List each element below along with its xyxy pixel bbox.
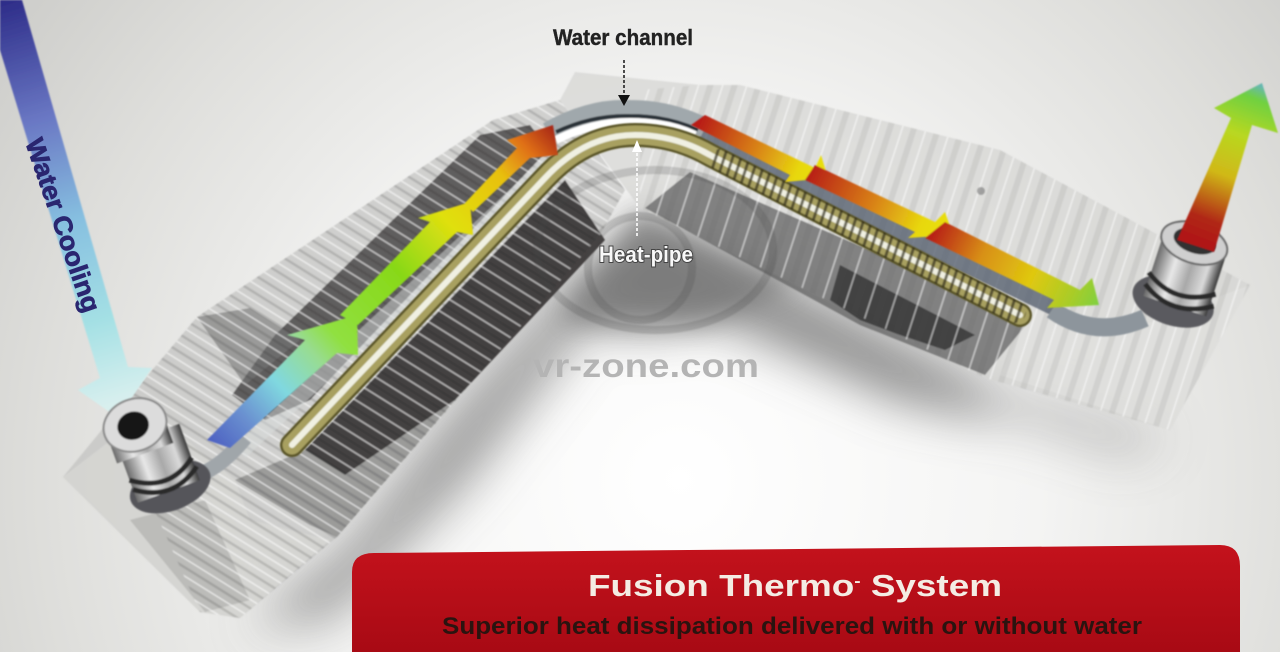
heatsink assembly (63, 72, 1250, 618)
label: Heat-pipe: Heat-pipe (599, 242, 693, 267)
arrow: heat-pipe pointer (632, 140, 642, 236)
metal band under rising flow (240, 165, 548, 452)
label: Water Cooling: Water Cooling (19, 134, 107, 316)
fin shapes: right dark band (645, 172, 1030, 375)
label: Water channel: Water channel (553, 25, 693, 50)
fitting: outlet (1126, 210, 1238, 337)
faint watermark logo (537, 170, 773, 330)
fin shapes: far edge (197, 308, 300, 385)
end block shading (130, 500, 250, 612)
shadow under arch (560, 212, 800, 325)
heat-pipe (292, 135, 1020, 445)
fin shapes: right dark blocks (830, 265, 975, 350)
right end block (1000, 285, 1250, 430)
banner (352, 545, 1240, 652)
watermark: vr-zone.com: vr-zone.com (533, 347, 759, 384)
arrow: heated water flow (691, 115, 1099, 308)
arrow: water cooling inlet (0, 0, 152, 418)
shadow below heatsink (250, 215, 1170, 625)
stripes: left block (110, 100, 625, 618)
fitting: inlet (96, 382, 218, 524)
banner subtitle: Superior heat dissipation delivered with or without water (442, 613, 1142, 640)
fin shapes: lower left mid band (235, 400, 455, 537)
water tube: inlet bend (185, 438, 245, 478)
left fin block (63, 100, 625, 618)
stripes: right block (640, 85, 1250, 430)
end block: inlet side (63, 410, 330, 618)
fin shapes: upper left band (232, 125, 548, 420)
banner title: - (854, 573, 861, 590)
spot on the screen (977, 187, 985, 195)
fin shapes: lower left dark band (305, 180, 605, 475)
right fin block (560, 72, 1250, 430)
banner title: Fusion Thermo (588, 568, 812, 603)
water tube: outlet bend (1052, 310, 1145, 327)
banner title: System (861, 568, 1002, 603)
label: Water channel (553, 25, 693, 106)
label: Heat-pipe (599, 140, 693, 267)
arrow: exhaust outlet (1177, 83, 1278, 252)
arrow: rising water flow (207, 125, 558, 448)
arrow: water channel pointer (618, 60, 630, 106)
water channel tube (185, 110, 1145, 478)
